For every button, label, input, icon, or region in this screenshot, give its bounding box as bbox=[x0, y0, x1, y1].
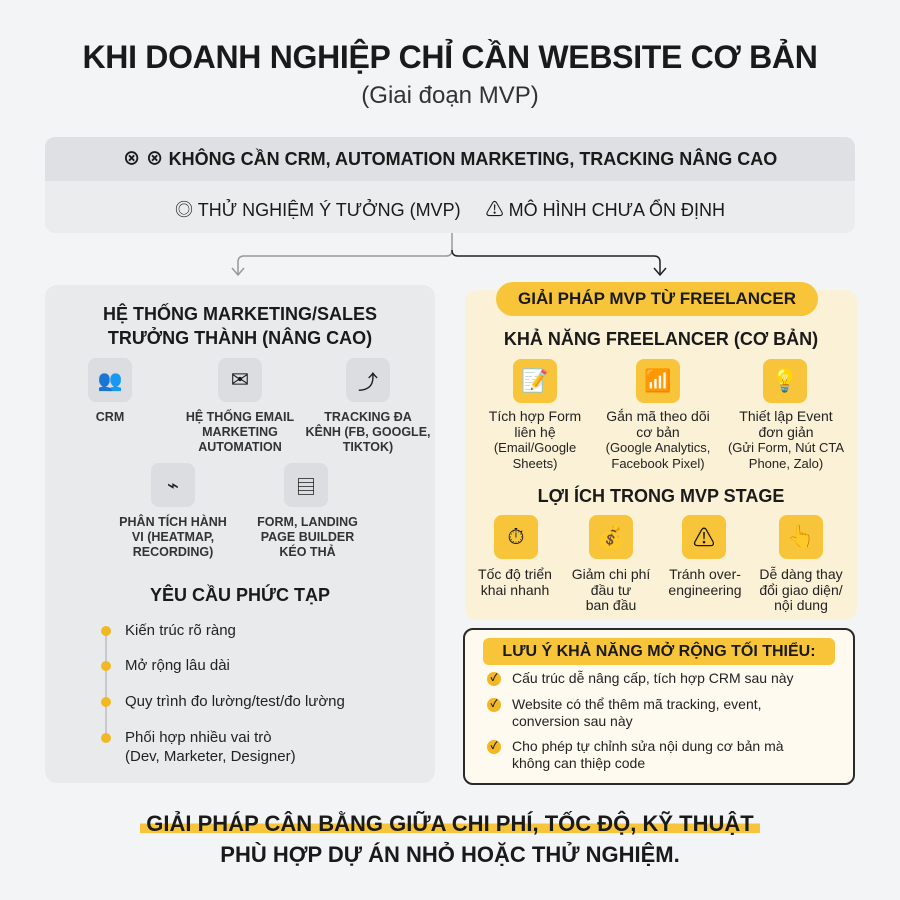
icon: email bbox=[218, 358, 262, 402]
list: requirements: Mở rộng lâu dài bbox=[125, 657, 230, 674]
text: over-engineering: engineering bbox=[668, 582, 742, 598]
text: cost: đầu tư bbox=[591, 582, 631, 598]
list: notes: Cấu trúc dễ nâng cấp, tích hợp CRM sau này bbox=[512, 670, 794, 686]
text: speed bbox=[478, 566, 552, 598]
label: crm: CRM bbox=[96, 410, 124, 424]
label: tracking: KÊNH (FB, GOOGLE, bbox=[306, 425, 430, 439]
list: requirements: Quy trình đo lường/test/đo lường bbox=[125, 693, 345, 710]
title: KHI DOANH NGHIỆP CHỈ CẦN WEBSITE CƠ BẢN bbox=[82, 39, 818, 75]
icon: bulb: 💡 bbox=[771, 368, 799, 393]
text: analytics: cơ bản bbox=[636, 424, 680, 440]
heading: freelancer capabilities: KHẢ NĂNG FREELANCER (CƠ BẢN) bbox=[504, 329, 818, 349]
text: easy change bbox=[759, 566, 843, 613]
text: over-engineering: Tránh over- bbox=[669, 566, 741, 582]
icon: analytics bbox=[636, 359, 680, 403]
icon: landing bbox=[284, 463, 328, 507]
icon: click: 👆 bbox=[787, 524, 815, 549]
list: notes: ✓ bbox=[490, 699, 498, 710]
text: form: liên hệ bbox=[514, 424, 556, 440]
label: email: HỆ THỐNG EMAIL MARKETING AUTOMATION bbox=[186, 410, 294, 454]
icon: stopwatch bbox=[494, 515, 538, 559]
icon: crm: 👥 bbox=[98, 370, 122, 392]
panel: top constraints bbox=[45, 137, 855, 233]
heading bbox=[103, 303, 377, 348]
band: no CRM: ⊗ ⊗ KHÔNG CẦN CRM, AUTOMATION MARKETING, TRACKING NÂNG CAO bbox=[123, 149, 777, 169]
icon: warning bbox=[682, 515, 726, 559]
pill: freelancer solution: GIẢI PHÁP MVP TỪ FREELANCER bbox=[518, 289, 796, 308]
text: events: đơn giản bbox=[758, 424, 814, 440]
list: notes: ✓ bbox=[490, 741, 498, 752]
text: form: Tích hợp Form bbox=[489, 408, 581, 424]
text: easy change: đổi giao diện/ bbox=[759, 582, 843, 598]
icon: tracking: ⤴ bbox=[358, 372, 378, 394]
label: tracking: TRACKING ĐA bbox=[324, 410, 412, 424]
text: easy change: nội dung bbox=[774, 597, 828, 613]
label: heatmap: PHÂN TÍCH HÀNH VI (HEATMAP, RECORDING) bbox=[119, 515, 227, 559]
text: analytics bbox=[606, 408, 710, 470]
heading: TRƯỞNG THÀNH (NÂNG CAO) bbox=[108, 328, 372, 348]
list: notes: conversion sau này bbox=[512, 713, 633, 729]
conclusion: GIẢI PHÁP CÂN BẰNG GIỮA CHI PHÍ, TỐC ĐỘ, KỸ THUẬT bbox=[146, 811, 754, 836]
icon: crm bbox=[88, 358, 132, 402]
text: MVP and unstable: ◎ THỬ NGHIỆM Ý TƯỞNG (MVP) ⚠ MÔ HÌNH CHƯA ỔN ĐỊNH bbox=[175, 200, 725, 220]
text: events: Phone, Zalo) bbox=[749, 456, 823, 470]
text: analytics: (Google Analytics, bbox=[606, 440, 710, 455]
panel: scalability note bbox=[463, 628, 855, 785]
list: requirements: (Dev, Marketer, Designer) bbox=[125, 748, 296, 765]
heading pill bbox=[483, 638, 835, 665]
list: requirements bbox=[101, 622, 345, 765]
list: requirements: Kiến trúc rõ ràng bbox=[125, 622, 236, 639]
icon: coins bbox=[589, 515, 633, 559]
icon: warning: ⚠ bbox=[693, 526, 715, 551]
icon: bulb bbox=[763, 359, 807, 403]
text: over-engineering bbox=[668, 566, 742, 598]
text: analytics: Facebook Pixel) bbox=[611, 456, 705, 470]
heading: complex requirements: YÊU CẦU PHỨC TẠP bbox=[150, 585, 330, 605]
icon: email: ✉ bbox=[231, 367, 249, 392]
conclusion bbox=[140, 810, 760, 867]
icon: heatmap: ⌁ bbox=[167, 474, 179, 496]
text: cost bbox=[572, 566, 650, 613]
label: landing: FORM, LANDING PAGE BUILDER KÉO THẢ bbox=[257, 515, 358, 559]
text: events: Thiết lập Event bbox=[739, 408, 833, 424]
list: notes bbox=[487, 670, 794, 771]
heading pill: LƯU Ý KHẢ NĂNG MỞ RỘNG TỐI THIỂU: bbox=[502, 643, 816, 660]
text: form bbox=[489, 408, 581, 470]
icon: click bbox=[779, 515, 823, 559]
heading: mvp benefits: LỢI ÍCH TRONG MVP STAGE bbox=[538, 486, 784, 506]
icon: coins: 💰 bbox=[597, 524, 625, 549]
text: form: (Email/Google bbox=[494, 440, 576, 455]
text: cost: Giảm chi phí bbox=[572, 566, 650, 582]
heading: HỆ THỐNG MARKETING/SALES bbox=[103, 304, 377, 324]
text: events bbox=[728, 408, 844, 470]
icon: heatmap bbox=[151, 463, 195, 507]
text: speed: khai nhanh bbox=[481, 582, 549, 598]
label: tracking: TIKTOK) bbox=[343, 440, 393, 454]
text: cost: ban đầu bbox=[586, 597, 636, 613]
label: tracking bbox=[306, 410, 430, 454]
icon: tracking bbox=[346, 358, 390, 402]
text: events: (Gửi Form, Nút CTA bbox=[728, 440, 844, 455]
list: notes: Cho phép tự chỉnh sửa nội dung cơ bản mà bbox=[512, 738, 784, 754]
conclusion: PHÙ HỢP DỰ ÁN NHỎ HOẶC THỬ NGHIỆM. bbox=[220, 842, 680, 867]
subtitle: (Giai đoạn MVP) bbox=[361, 82, 539, 109]
icon: form: 📝 bbox=[521, 368, 549, 393]
list: requirements: Phối hợp nhiều vai trò bbox=[125, 729, 272, 746]
icon: stopwatch: ⏱ bbox=[507, 524, 525, 549]
pill: freelancer solution bbox=[496, 282, 818, 316]
band: no CRM bbox=[45, 137, 855, 181]
panel: right background bbox=[465, 290, 857, 620]
list: notes: không can thiệp code bbox=[512, 755, 645, 771]
icon: analytics: 📶 bbox=[644, 368, 672, 393]
icon: landing: ▤ bbox=[296, 476, 316, 498]
text: speed: Tốc độ triển bbox=[478, 566, 552, 582]
list: notes: ✓ bbox=[490, 673, 498, 684]
text: easy change: Dễ dàng thay bbox=[759, 566, 843, 582]
icon: form bbox=[513, 359, 557, 403]
list: notes: Website có thể thêm mã tracking, event, bbox=[512, 696, 762, 712]
text: analytics: Gắn mã theo dõi bbox=[606, 408, 710, 424]
panel: advanced systems bbox=[45, 285, 435, 783]
text: form: Sheets) bbox=[513, 456, 557, 470]
